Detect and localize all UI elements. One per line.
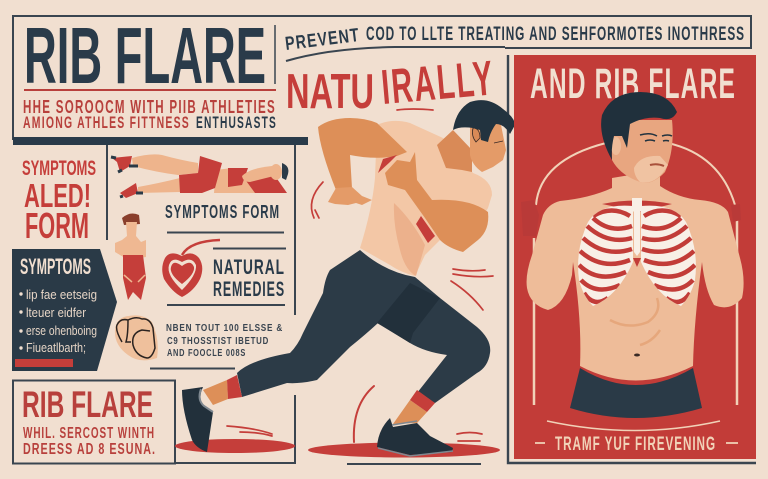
runner: back ankle and cuff — [203, 380, 228, 405]
text block: small notes: C9 THOSSTIST IBETUD — [167, 335, 269, 347]
motion lines — [227, 109, 493, 449]
text block: small notes: NBEN TOUT 100 ELSSE & — [166, 322, 283, 334]
heavy divider — [13, 137, 308, 145]
runner: raised arm — [318, 118, 407, 190]
poster man: body — [527, 170, 744, 380]
poster man: abdomen shading — [610, 298, 660, 345]
panel: rib flare box: DREESS AD 8 ESUNA. — [23, 441, 156, 458]
runner: hair — [453, 100, 515, 142]
icon: lying figure — [111, 154, 288, 198]
runner: rib accent — [378, 155, 397, 173]
panel: rib flare box: WHIL. SERCOST WINTH — [23, 425, 155, 442]
label: natural remedies — [167, 248, 286, 306]
runner: ear and eye — [472, 128, 503, 143]
runner: front ankle and cuff — [393, 400, 427, 424]
runner: red band — [416, 216, 435, 243]
runner: inner thigh shade — [377, 283, 440, 343]
poster man: ear — [611, 137, 621, 155]
icon: small standing figure — [115, 214, 146, 300]
panel: symptoms list: SYMPTOMS — [20, 254, 91, 279]
runner: back shoe — [182, 387, 213, 452]
panel: symptoms list — [12, 249, 117, 371]
subtitle — [23, 97, 277, 132]
panel: rib flare box — [13, 380, 175, 464]
poster man: ribcage — [578, 198, 696, 306]
heading: naturally: IRALLY — [379, 51, 497, 115]
panel: symptoms list: Fiueatlbarth; — [26, 340, 86, 355]
poster arc — [547, 421, 720, 430]
subtitle: HHE SOROOCM WITH PIIB ATHLETIES — [23, 97, 276, 117]
text block: small notes: AND FOOCLE 008S — [167, 347, 246, 359]
title: RIB FLARE — [24, 11, 266, 100]
label: symptoms form — [165, 202, 284, 234]
panel: symptoms list: erse ohenboing — [26, 323, 97, 338]
panel: rib flare box: RIB FLARE — [22, 384, 153, 425]
poster arch and poles — [536, 143, 735, 205]
top banner headline — [284, 24, 745, 55]
runner: lower hand — [328, 187, 372, 205]
text block: small notes — [150, 322, 283, 370]
runner figure — [182, 100, 515, 456]
ground shadows — [175, 439, 500, 458]
panel: red poster — [514, 55, 756, 459]
icon: heart — [162, 240, 220, 297]
heading: naturally — [286, 51, 497, 119]
subtitle: AMIONG ATHLES FITTNESS — [23, 113, 190, 132]
poster man: facial features — [640, 134, 672, 166]
panel: symptoms list: lip fae eetseig — [26, 287, 97, 302]
subtitle: ENTHUSASTS — [196, 113, 277, 132]
poster man: shorts — [570, 368, 702, 418]
left heading: symptoms aled form — [22, 157, 96, 246]
icon: fist — [115, 315, 158, 360]
top banner headline: PREVENT — [284, 25, 361, 55]
runner: forearm and hand — [385, 152, 488, 252]
left heading: symptoms aled form: ALED! — [24, 177, 91, 214]
label: symptoms form: SYMPTOMS FORM — [165, 202, 280, 222]
heading: naturally: NATU — [286, 65, 374, 119]
label: natural remedies: NATURAL — [213, 256, 285, 279]
left heading: symptoms aled form: SYMPTOMS — [22, 157, 96, 180]
poster hands — [521, 200, 741, 236]
runner: face — [470, 120, 506, 172]
runner: abdomen shading — [394, 203, 425, 276]
poster man: face — [612, 120, 673, 183]
runner: torso — [360, 121, 492, 276]
panel: symptoms list: lteuer eidfer — [26, 305, 87, 320]
label: natural remedies: REMEDIES — [213, 278, 285, 301]
runner: front shoe — [377, 418, 453, 455]
left heading: symptoms aled form: FORM — [25, 205, 89, 246]
runner: neck — [437, 130, 472, 172]
poster man: hair — [601, 92, 677, 160]
runner: leggings — [237, 250, 490, 403]
